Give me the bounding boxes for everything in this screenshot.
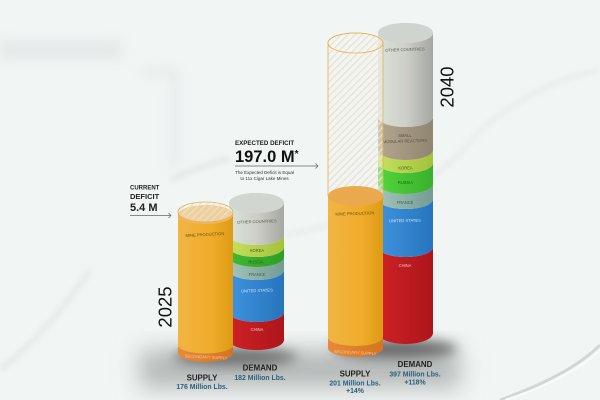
label: deficit: DEFICIT	[130, 192, 160, 201]
top cap	[378, 23, 433, 43]
mine top	[328, 186, 383, 206]
segment: russia	[378, 163, 433, 194]
segment: mine production	[178, 205, 233, 353]
segment: china	[378, 247, 433, 344]
deficit hatch	[178, 202, 233, 222]
segment: other countries	[378, 23, 433, 127]
label: china: CHINA	[251, 327, 264, 332]
segment: united states	[229, 270, 284, 322]
segment: france	[229, 257, 284, 280]
chart: 2040 supply cylinder	[328, 33, 383, 357]
amount: 397 Million Lbs.	[389, 372, 441, 378]
segment: other countries	[229, 193, 284, 245]
label: other countries: OTHER COUNTRIES	[385, 46, 425, 53]
label: mine production: MINE PRODUCTION	[185, 231, 225, 238]
mine top	[178, 206, 233, 224]
year: 2025: 2025	[154, 286, 176, 328]
label: united states: UNITED STATES	[389, 218, 421, 223]
note line 1: The Expected Deficit is Equal	[235, 170, 294, 175]
value: 197.0 M: 197.0 M	[235, 148, 295, 166]
segment: secondary supply	[178, 345, 233, 362]
label: korea: KOREA	[398, 166, 413, 170]
heading: DEMAND	[243, 364, 278, 372]
label: korea: KOREA	[250, 248, 264, 253]
value: 197.0 M: *	[295, 149, 299, 160]
year: 2040: 2040	[436, 66, 458, 108]
label: expected deficit: EXPECTED DEFICIT	[235, 140, 294, 147]
arrow	[235, 164, 318, 168]
segment: china	[229, 312, 284, 350]
heading: SUPPLY	[187, 374, 218, 382]
caption: 2040 supply	[329, 370, 381, 395]
change: +14%	[346, 388, 364, 395]
change: +118%	[404, 380, 426, 386]
caption: 2025 demand	[234, 364, 286, 382]
segment: korea	[229, 235, 284, 257]
note line 2: to 11x Cigar Lake Mines	[240, 176, 289, 181]
label: france: FRANCE	[397, 200, 414, 205]
amount: 176 Million Lbs.	[176, 384, 228, 391]
shadows under the cylinders	[140, 339, 460, 388]
label: russia: RUSSIA	[398, 180, 413, 185]
label: france: FRANCE	[249, 272, 266, 277]
segment: small modular reactors	[378, 117, 433, 160]
segment: russia	[229, 247, 284, 267]
label: china: CHINA	[399, 263, 412, 268]
value: 5.4 M: 5.4 M	[130, 202, 158, 214]
label: united states: UNITED STATES	[241, 287, 273, 294]
chart: 2040 demand cylinder	[378, 23, 433, 344]
heading: DEMAND	[398, 360, 433, 369]
heading: SUPPLY	[340, 370, 371, 378]
deficit hatch top	[328, 33, 383, 53]
label: secondary supply: SECONDARY SUPPLY	[185, 353, 228, 361]
label: other countries: OTHER COUNTRIES	[237, 218, 277, 225]
label: russia: RUSSIA	[248, 260, 264, 264]
deficit hatch body	[328, 33, 383, 196]
segment: secondary supply	[328, 337, 383, 357]
chart: 2025 supply cylinder	[178, 202, 233, 362]
callout: current deficit	[130, 186, 171, 218]
label: small modular reactors: SMALL	[398, 133, 412, 138]
amount: 182 Million Lbs.	[234, 375, 286, 382]
label: modular reactors: MODULAR REACTORS	[383, 138, 427, 144]
label: current: CURRENT	[130, 186, 160, 192]
callout: expected deficit	[235, 140, 318, 181]
label: mine production: MINE PRODUCTION	[335, 210, 375, 217]
segment: mine production	[328, 196, 383, 346]
caption: 2025 supply	[176, 374, 228, 391]
label: secondary supply: SECONDARY SUPPLY	[334, 349, 377, 356]
arrow	[130, 213, 171, 218]
segment: united states	[378, 199, 433, 257]
segment: france	[378, 184, 433, 209]
chart: 2025 demand cylinder	[229, 193, 284, 350]
amount: 201 Million Lbs.	[329, 380, 381, 388]
top cap	[229, 193, 284, 213]
segment: korea	[378, 150, 433, 173]
caption: 2040 demand	[389, 360, 441, 386]
